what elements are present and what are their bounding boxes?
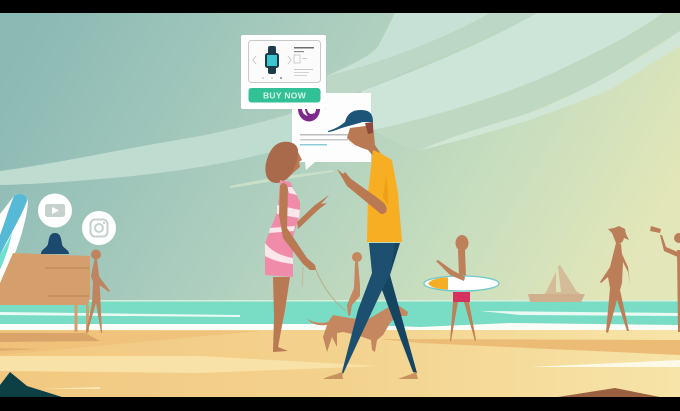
button: BUY NOW bbox=[263, 90, 307, 100]
icon: purple logo bbox=[298, 109, 320, 122]
surfboard bbox=[0, 194, 28, 284]
surfboard bbox=[424, 276, 499, 291]
icon: youtube bbox=[38, 194, 72, 228]
neck and face bbox=[347, 125, 381, 156]
face bbox=[286, 148, 302, 180]
left leg bbox=[342, 243, 395, 374]
product frame bbox=[248, 40, 320, 82]
dog and leash bbox=[302, 267, 408, 352]
sailboat bbox=[528, 265, 585, 302]
wooden board bbox=[0, 253, 90, 332]
icon: instagram bbox=[82, 211, 116, 245]
figure with camera bbox=[650, 226, 680, 332]
dress bbox=[265, 180, 300, 277]
sky background bbox=[0, 13, 680, 303]
legs bbox=[273, 277, 290, 352]
speech bubble bbox=[292, 93, 371, 170]
arm bbox=[337, 169, 387, 214]
standing figure with hat bbox=[600, 226, 630, 333]
seated person silhouette bbox=[41, 233, 69, 254]
rock bottom left bbox=[0, 372, 62, 397]
figure by the board bbox=[86, 250, 110, 334]
woman bbox=[265, 142, 329, 352]
cap bbox=[328, 110, 373, 132]
rock bottom right bbox=[558, 388, 660, 397]
sand bbox=[0, 330, 680, 397]
raised arm bbox=[297, 195, 329, 229]
right leg bbox=[376, 243, 417, 373]
sea bbox=[0, 300, 680, 331]
background figure behind dog bbox=[347, 252, 362, 316]
shirt bbox=[367, 150, 402, 242]
hair bbox=[265, 142, 298, 183]
icon: smartwatch bbox=[265, 46, 279, 74]
card: product bbox=[241, 35, 326, 109]
man bbox=[323, 110, 418, 379]
arm holding leash bbox=[279, 183, 316, 270]
feet bbox=[323, 372, 343, 379]
dress stripes bbox=[265, 187, 300, 264]
surfer with board bbox=[424, 235, 499, 341]
